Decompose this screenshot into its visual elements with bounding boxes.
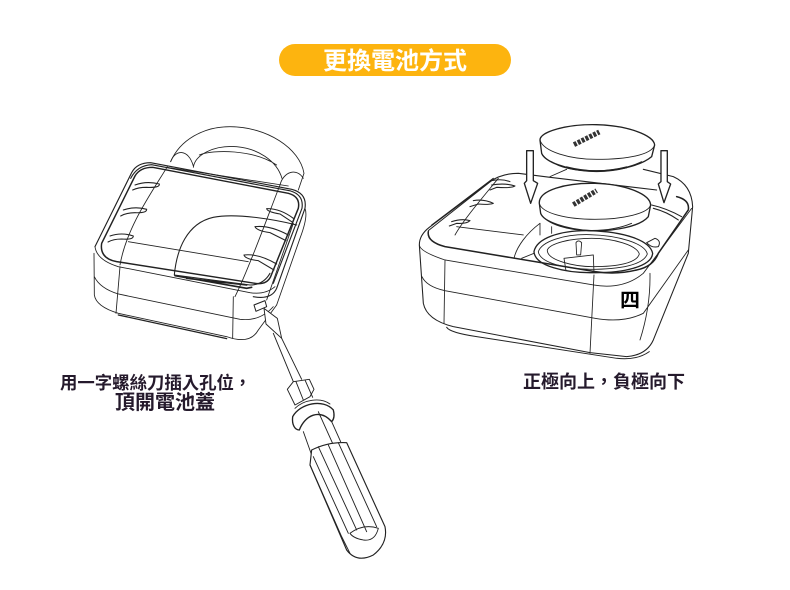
icon: padlock with battery cover being opened (94, 127, 306, 340)
icon: flathead screwdriver (264, 308, 386, 558)
left caption (60, 373, 251, 414)
side marking on lock: 四 (620, 290, 640, 312)
left caption: 用一字螺絲刀插入孔位， (60, 373, 251, 393)
arrow: right down arrow (658, 151, 671, 203)
icon: open padlock with two coin batteries (419, 125, 693, 359)
right caption: 正極向上，負極向下 (523, 372, 685, 392)
left caption: 頂開電池蓋 (115, 392, 215, 414)
arrow: left down arrow (524, 151, 538, 203)
title banner: 更換電池方式 (323, 48, 467, 75)
title banner (279, 44, 511, 76)
coin battery in the compartment ring (522, 223, 659, 273)
